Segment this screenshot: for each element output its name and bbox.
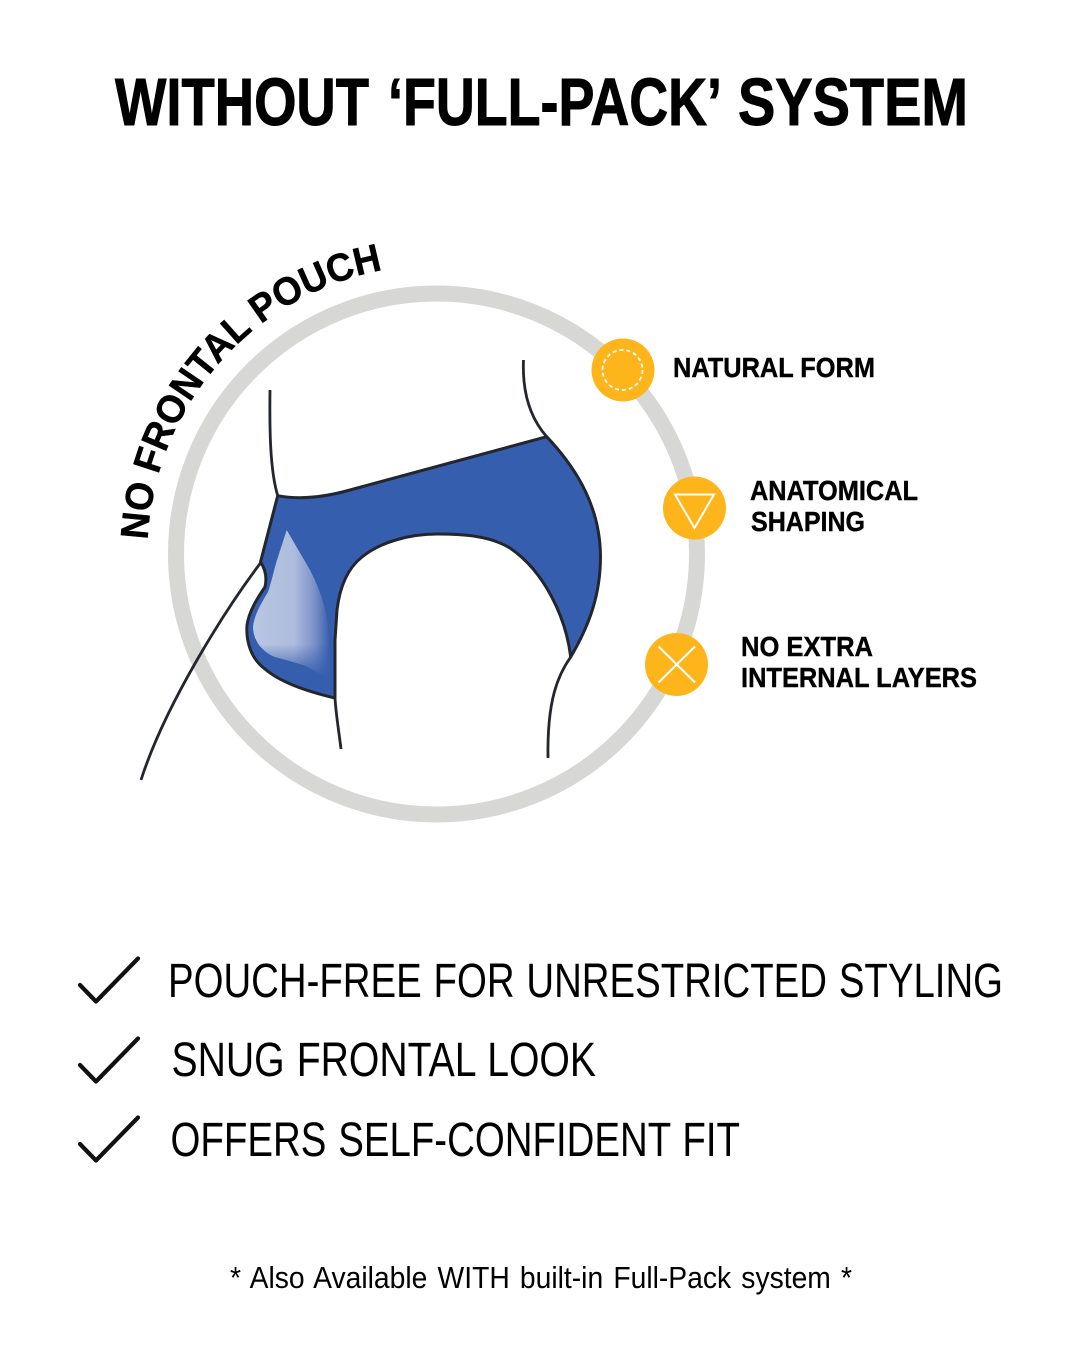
benefit 2: SNUG FRONTAL LOOK [172, 1034, 596, 1087]
check 2 [80, 1038, 138, 1082]
briefs illustration [247, 437, 600, 698]
check 3 [80, 1118, 138, 1160]
icon: dashed circle [592, 338, 654, 402]
footnote: * Also Available WITH built-in Full-Pack system * [230, 1260, 852, 1295]
label: ANATOMICAL [750, 475, 918, 506]
label [750, 475, 918, 537]
feature: no extra internal layers [645, 631, 977, 696]
label: INTERNAL LAYERS [741, 662, 977, 693]
title: ‘FULL-PACK’ [388, 65, 722, 140]
feature: natural form [592, 338, 875, 402]
grey ring [176, 294, 697, 814]
title: SYSTEM [738, 65, 968, 140]
title [115, 65, 968, 140]
check 1 [80, 958, 138, 1002]
feature: anatomical shaping [663, 475, 918, 540]
briefs shape [247, 437, 600, 698]
body outlines [141, 360, 571, 780]
icon: cross [645, 633, 708, 696]
label [741, 631, 977, 693]
pouch highlight fade [252, 642, 330, 680]
title: WITHOUT [115, 65, 369, 140]
diagram: no frontal pouch [120, 244, 705, 822]
pouch highlight [253, 530, 329, 676]
label: SHAPING [751, 506, 865, 537]
benefits list [80, 955, 1003, 1167]
curved label: NO FRONTAL POUCH [120, 244, 381, 538]
label: NO EXTRA [741, 631, 873, 662]
label: NATURAL FORM [673, 352, 875, 383]
icon: triangle [663, 476, 726, 540]
benefit 3: OFFERS SELF-CONFIDENT FIT [170, 1114, 740, 1167]
